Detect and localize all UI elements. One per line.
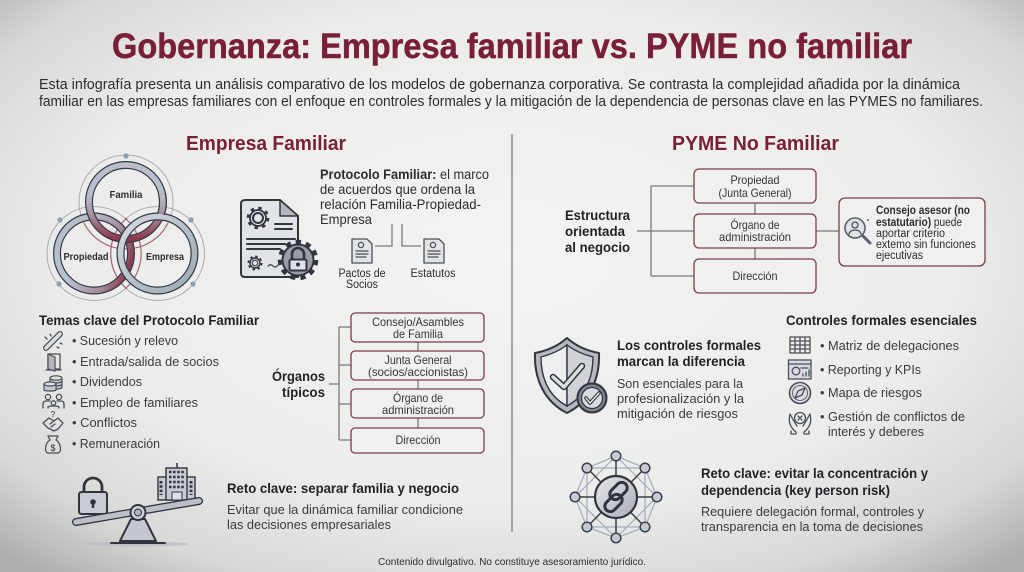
list item: remuneración xyxy=(46,436,160,453)
callout: consejo asesor: aportar criterio xyxy=(876,228,945,240)
list item: conflictos: ? xyxy=(51,410,56,419)
list item: gestión de conflictos: interés y deberes xyxy=(828,424,924,439)
label: Empresa: Empresa xyxy=(146,251,184,263)
list item: entrada/salida: • Entrada/salida de socios xyxy=(72,354,219,369)
callout: reto clave PYME xyxy=(701,465,928,534)
icon: shield with check xyxy=(535,338,606,413)
box: dirección xyxy=(351,428,484,453)
footer note: Contenido divulgativo. No constituye asesoramiento jurídico. xyxy=(378,556,646,568)
heading: PYME No Familiar: PYME No Familiar xyxy=(672,133,839,155)
box: dirección: Dirección xyxy=(732,269,778,283)
callout: reto clave familia xyxy=(227,480,463,532)
box: órgano de administración: administración xyxy=(719,230,791,244)
item: Pactos de Socios: Pactos de xyxy=(338,268,386,280)
box: órgano de administración xyxy=(351,389,484,418)
text: controles formales marcan la diferencia: marcan la diferencia xyxy=(617,353,745,369)
label: órganos típicos: Órganos xyxy=(272,367,325,384)
list item: matriz de delegaciones: • Matriz de delegaciones xyxy=(820,338,959,353)
heading: Empresa Familiar: Empresa Familiar xyxy=(186,133,346,155)
text: protocolo familiar: relación Familia-Propiedad- xyxy=(320,196,481,212)
box: consejo: de Familia xyxy=(393,327,443,341)
item: Pactos de Socios xyxy=(338,239,386,291)
box: dirección xyxy=(694,259,816,293)
callout: reto clave familia: Reto clave: separar familia y negocio xyxy=(227,480,459,496)
text: controles formales marcan la diferencia xyxy=(617,337,761,421)
label: Familia: Familia xyxy=(110,189,143,201)
text: protocolo familiar xyxy=(320,166,489,227)
icon: magnifier with person xyxy=(845,218,870,243)
text: controles formales marcan la diferencia: Los controles formales xyxy=(617,337,761,353)
box: junta general: (socios/accionistas) xyxy=(368,365,468,379)
item: Estatutos: Estatutos xyxy=(410,268,456,280)
callout: consejo asesor: estatutario) puede xyxy=(876,217,962,229)
box: propiedad: (Junta General) xyxy=(718,186,792,200)
callout: reto clave PYME: Reto clave: evitar la concentración y xyxy=(701,465,928,481)
list item: conflictos xyxy=(43,410,137,431)
label: estructura orientada al negocio: orientada xyxy=(565,223,625,239)
box: órgano de administración: Órgano de xyxy=(393,390,443,405)
callout: consejo asesor: Consejo asesor (no xyxy=(876,205,970,217)
box: consejo: Consejo/Asambles xyxy=(372,315,464,329)
callout: consejo asesor: extemo sin funciones xyxy=(876,239,976,251)
item: Estatutos xyxy=(410,239,456,280)
connectors: protocol to documents xyxy=(375,224,421,246)
callout: reto clave familia: las decisiones empresariales xyxy=(227,517,391,532)
icon: protocol document with gears and lock xyxy=(241,200,316,278)
box: órgano de administración: Órgano de xyxy=(730,217,780,232)
callout: reto clave PYME: Requiere delegación formal, controles y xyxy=(701,504,924,519)
box: junta general xyxy=(351,351,484,380)
box: junta general: Junta General xyxy=(384,353,452,367)
text: controles formales marcan la diferencia: profesionalización y la xyxy=(617,391,745,406)
label: estructura orientada al negocio xyxy=(565,207,630,255)
list item: sucesión: • Sucesión y relevo xyxy=(72,333,178,348)
label: órganos típicos: típicos xyxy=(282,384,325,400)
heading: controles formales esenciales: Controles formales esenciales xyxy=(786,312,977,328)
text: controles formales marcan la diferencia: mitigación de riesgos xyxy=(617,406,738,421)
callout: consejo asesor: ejecutivas xyxy=(876,250,923,262)
list item: empleo de familiares: • Empleo de familiares xyxy=(72,395,198,410)
label: Propiedad: Propiedad xyxy=(64,251,108,263)
list item: dividendos xyxy=(44,374,142,391)
panel: temas clave xyxy=(39,312,260,453)
callout: reto clave familia: Evitar que la dinámica familiar condicione xyxy=(227,502,463,517)
list item: reporting y KPIs: • Reporting y KPIs xyxy=(820,362,921,377)
center divider xyxy=(511,134,513,532)
list item: gestión de conflictos xyxy=(789,409,965,439)
box: consejo xyxy=(351,313,484,342)
diagram: estructura PYME xyxy=(637,169,839,293)
list item: remuneración: • Remuneración xyxy=(72,436,160,451)
list item: dividendos: • Dividendos xyxy=(72,374,142,389)
title: Gobernanza: Empresa familiar vs. PYME no familiar xyxy=(112,27,912,66)
list item: reporting y KPIs xyxy=(788,360,921,379)
box: dirección: Dirección xyxy=(396,433,440,447)
intro paragraph: Esta infografía presenta un análisis comparativo de los modelos de gobernanza corporativa. Se contrasta la complejidad añadida por la dinámica xyxy=(39,77,961,93)
heading: temas clave: Temas clave del Protocolo Familiar xyxy=(39,312,260,328)
list item: conflictos: • Conflictos xyxy=(72,415,137,430)
icon: balance scale xyxy=(76,463,199,546)
box: órgano de administración: administración xyxy=(382,403,454,417)
box: órgano de administración xyxy=(694,214,816,248)
intro paragraph xyxy=(39,77,983,110)
intro paragraph: familiar en las empresas familiares con el enfoque en controles formales y la mitigación de la dependencia de personas clave en las PYMES no familiares. xyxy=(39,94,983,110)
list item: remuneración: $ xyxy=(50,443,56,453)
label: estructura orientada al negocio: Estructura xyxy=(565,207,630,223)
label: órganos típicos xyxy=(272,367,325,400)
item: Pactos de Socios: Socios xyxy=(346,279,378,291)
callout: reto clave PYME: dependencia (key person risk) xyxy=(701,482,890,498)
box: propiedad xyxy=(694,169,816,203)
text: protocolo familiar: Empresa xyxy=(320,211,372,227)
list item: mapa de riesgos: • Mapa de riesgos xyxy=(820,385,922,400)
text: controles formales marcan la diferencia: Son esenciales para la xyxy=(617,376,744,391)
list item: gestión de conflictos: • Gestión de conflictos de xyxy=(820,409,965,424)
diagram: three overlapping circles xyxy=(47,153,204,300)
text: protocolo familiar: Protocolo Familiar: el marco xyxy=(320,166,489,182)
label: estructura orientada al negocio: al negocio xyxy=(565,239,630,255)
callout: reto clave PYME: transparencia en la toma de decisiones xyxy=(701,519,923,534)
callout: consejo asesor xyxy=(839,198,985,266)
panel: controles formales esenciales xyxy=(786,312,977,439)
list item: mapa de riesgos xyxy=(790,382,922,404)
icon: network with central chain link xyxy=(570,451,662,543)
box: propiedad: Propiedad xyxy=(730,173,780,187)
text: protocolo familiar: de acuerdos que ordena la xyxy=(320,181,475,197)
diagram: órganos típicos xyxy=(272,313,484,453)
